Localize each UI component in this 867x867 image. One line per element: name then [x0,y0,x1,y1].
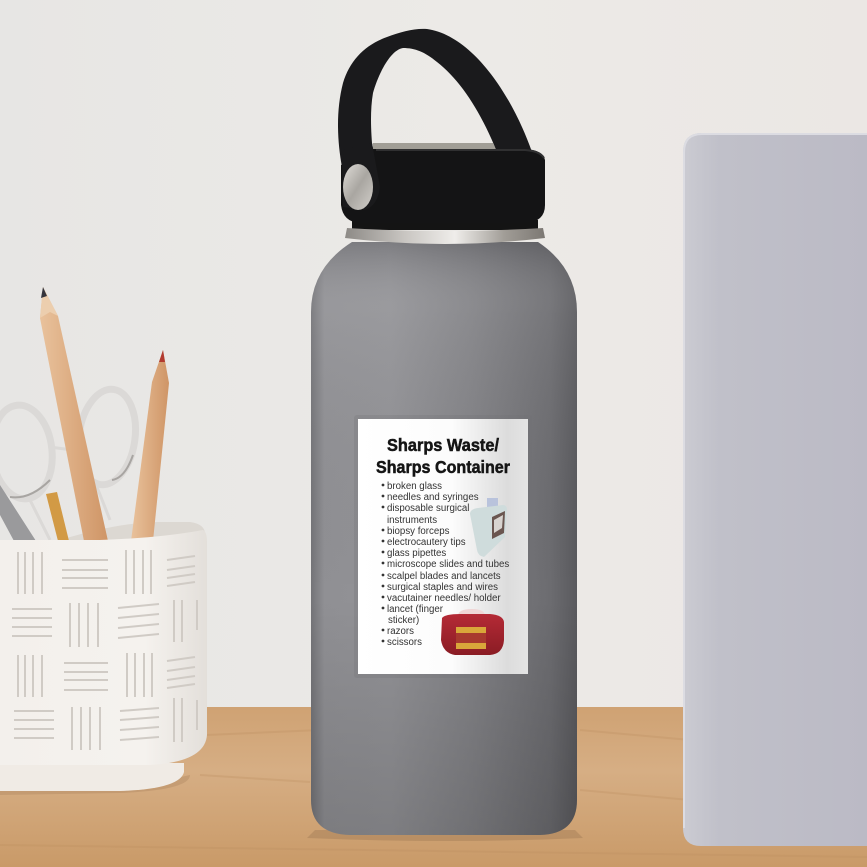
metal neck ring [345,228,545,244]
bullet list [387,481,509,648]
bullet list: instruments [387,515,437,526]
pencil: red tip [131,350,169,541]
bullet list: lancet (finger [387,604,444,615]
bullet list: surgical staples and wires [387,582,498,593]
strap end over cap [342,143,380,210]
dark gasket under cap [352,220,538,230]
water bottle [311,29,577,835]
pen and grey tool in cup [0,485,69,541]
icon: red sharps container [441,609,504,655]
laptop [683,133,867,846]
bullet list: vacutainer needles/ holder [387,593,501,604]
bullet list: broken glass [387,481,442,492]
bullet list: razors [387,626,414,637]
cup [0,530,207,791]
bullet list: needles and syringes [387,492,479,503]
wooden table [0,707,867,867]
bullet list: sticker) [388,615,419,626]
bullet list: disposable surgical [387,503,469,514]
bullet list: glass pipettes [387,548,446,559]
handle strap [338,29,532,210]
bullet list: biopsy forceps [387,526,450,537]
cup base [0,763,184,791]
bottle body [311,242,577,835]
cup body [0,530,207,765]
bullet list: electrocautery tips [387,537,466,548]
cap screw [343,164,373,210]
title [376,435,510,477]
scissors handles [0,386,141,540]
sticker card [358,419,528,674]
cap top plate [373,143,497,152]
cup interior [60,522,205,545]
bullets [382,484,384,642]
sticker [354,415,532,678]
bullet list: microscope slides and tubes [387,559,509,570]
pencil: tall left [40,287,108,541]
bottle vertical shading [311,242,577,835]
title: Sharps Container [376,457,510,477]
bullet list: scissors [387,637,422,648]
cap [341,149,545,223]
bullet list: scalpel blades and lancets [387,571,501,582]
icon: white sharps container [470,498,507,557]
cup basket-weave pattern [12,550,197,750]
title: Sharps Waste/ [387,435,499,455]
